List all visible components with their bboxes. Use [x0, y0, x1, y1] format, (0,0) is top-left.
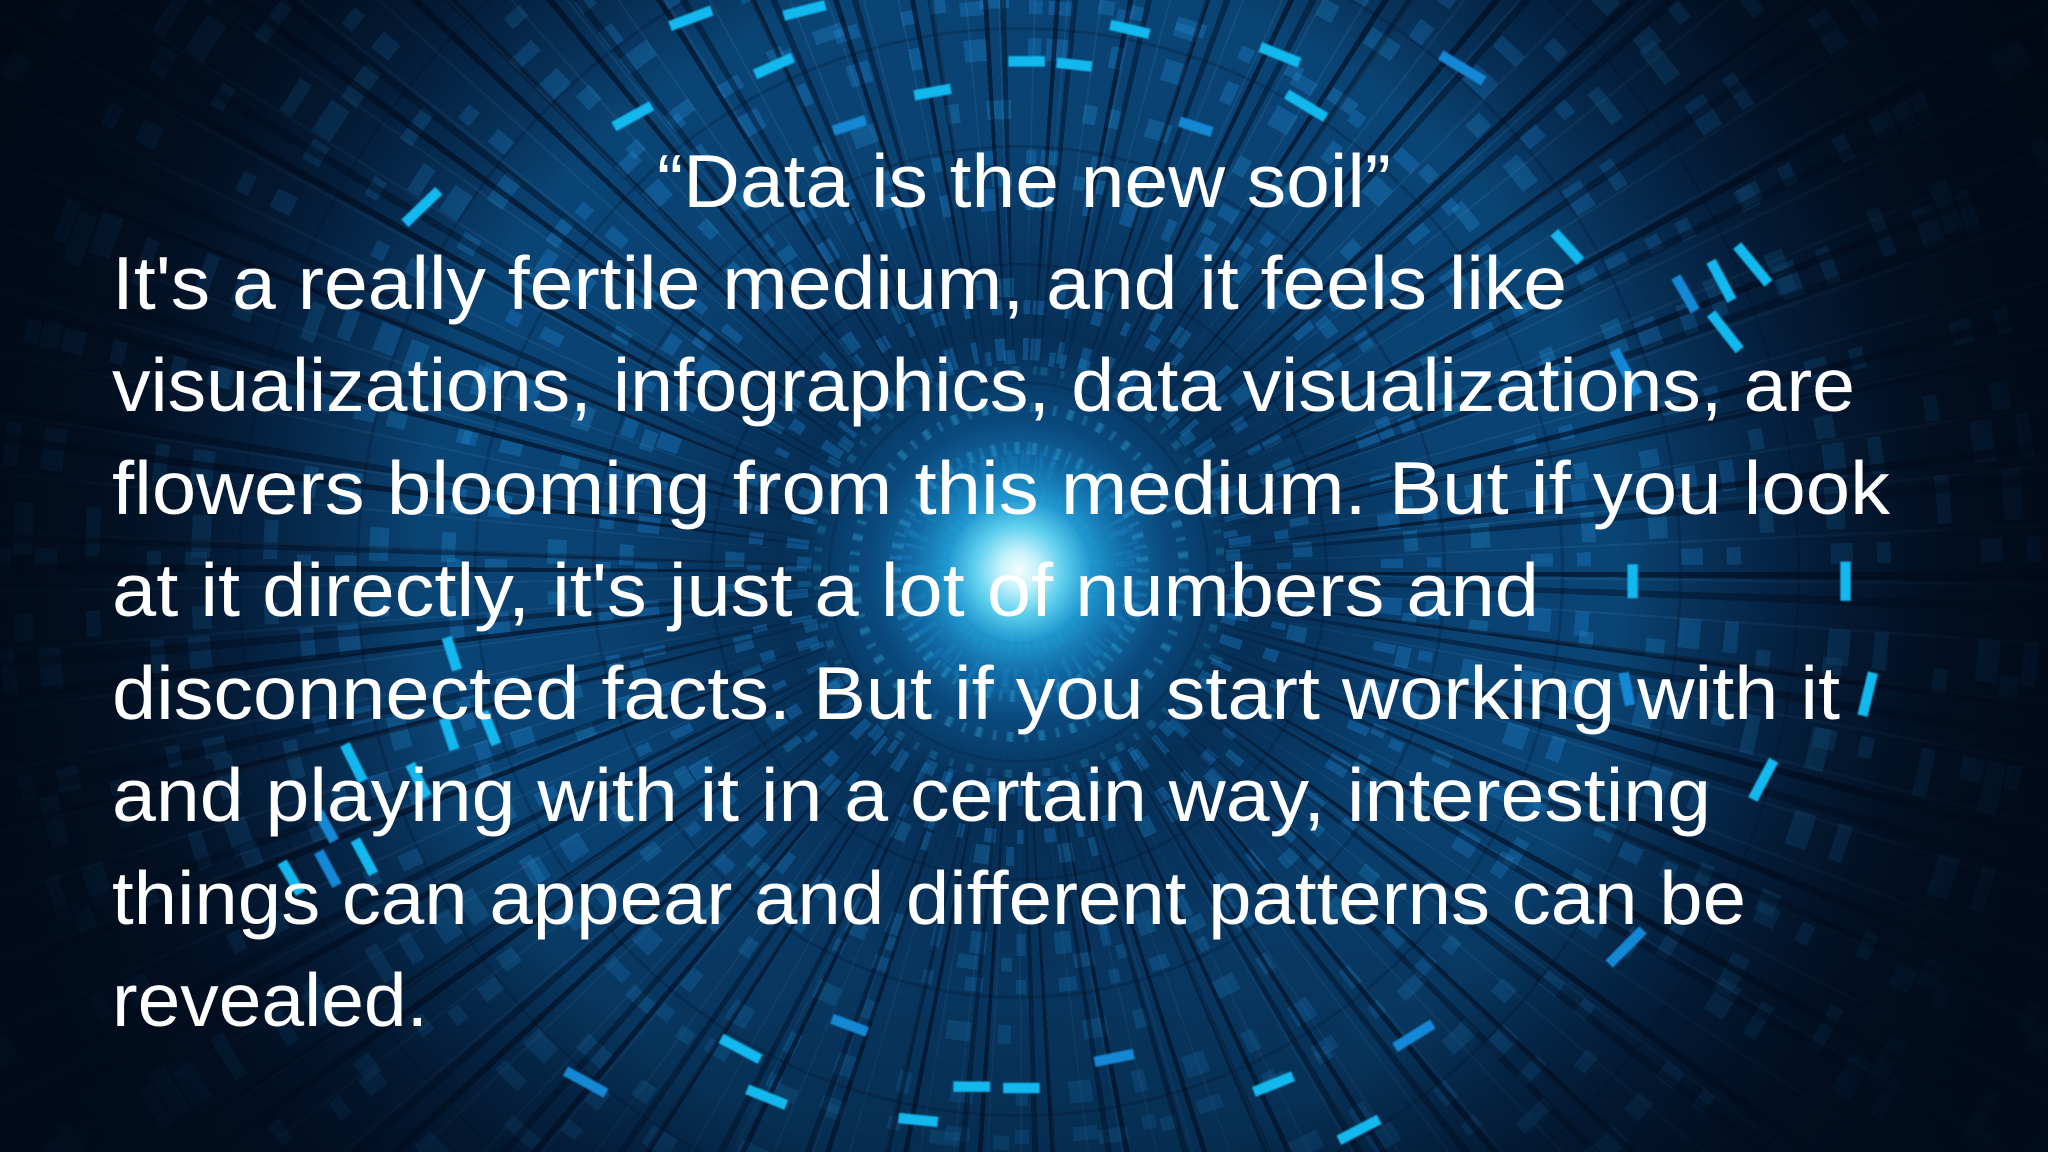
- body text line 3: flowers blooming from this medium. But if you look: [112, 446, 1891, 530]
- body text line 1: It's a really fertile medium, and it feels like: [112, 241, 1567, 325]
- background: dotted rings around the core: [813, 366, 1225, 778]
- body text line 4: at it directly, it's just a lot of numbers and: [112, 548, 1539, 632]
- body text line 6: and playing with it in a certain way, interesting: [112, 753, 1711, 837]
- body text line 8: revealed.: [112, 958, 428, 1042]
- body text line 7: things can appear and different patterns can be: [112, 856, 1746, 940]
- heading: quote title: “Data is the new soil”: [657, 139, 1391, 223]
- body text line 2: visualizations, infographics, data visualizations, are: [112, 343, 1855, 427]
- body text line 5: disconnected facts. But if you start working with it: [112, 651, 1840, 735]
